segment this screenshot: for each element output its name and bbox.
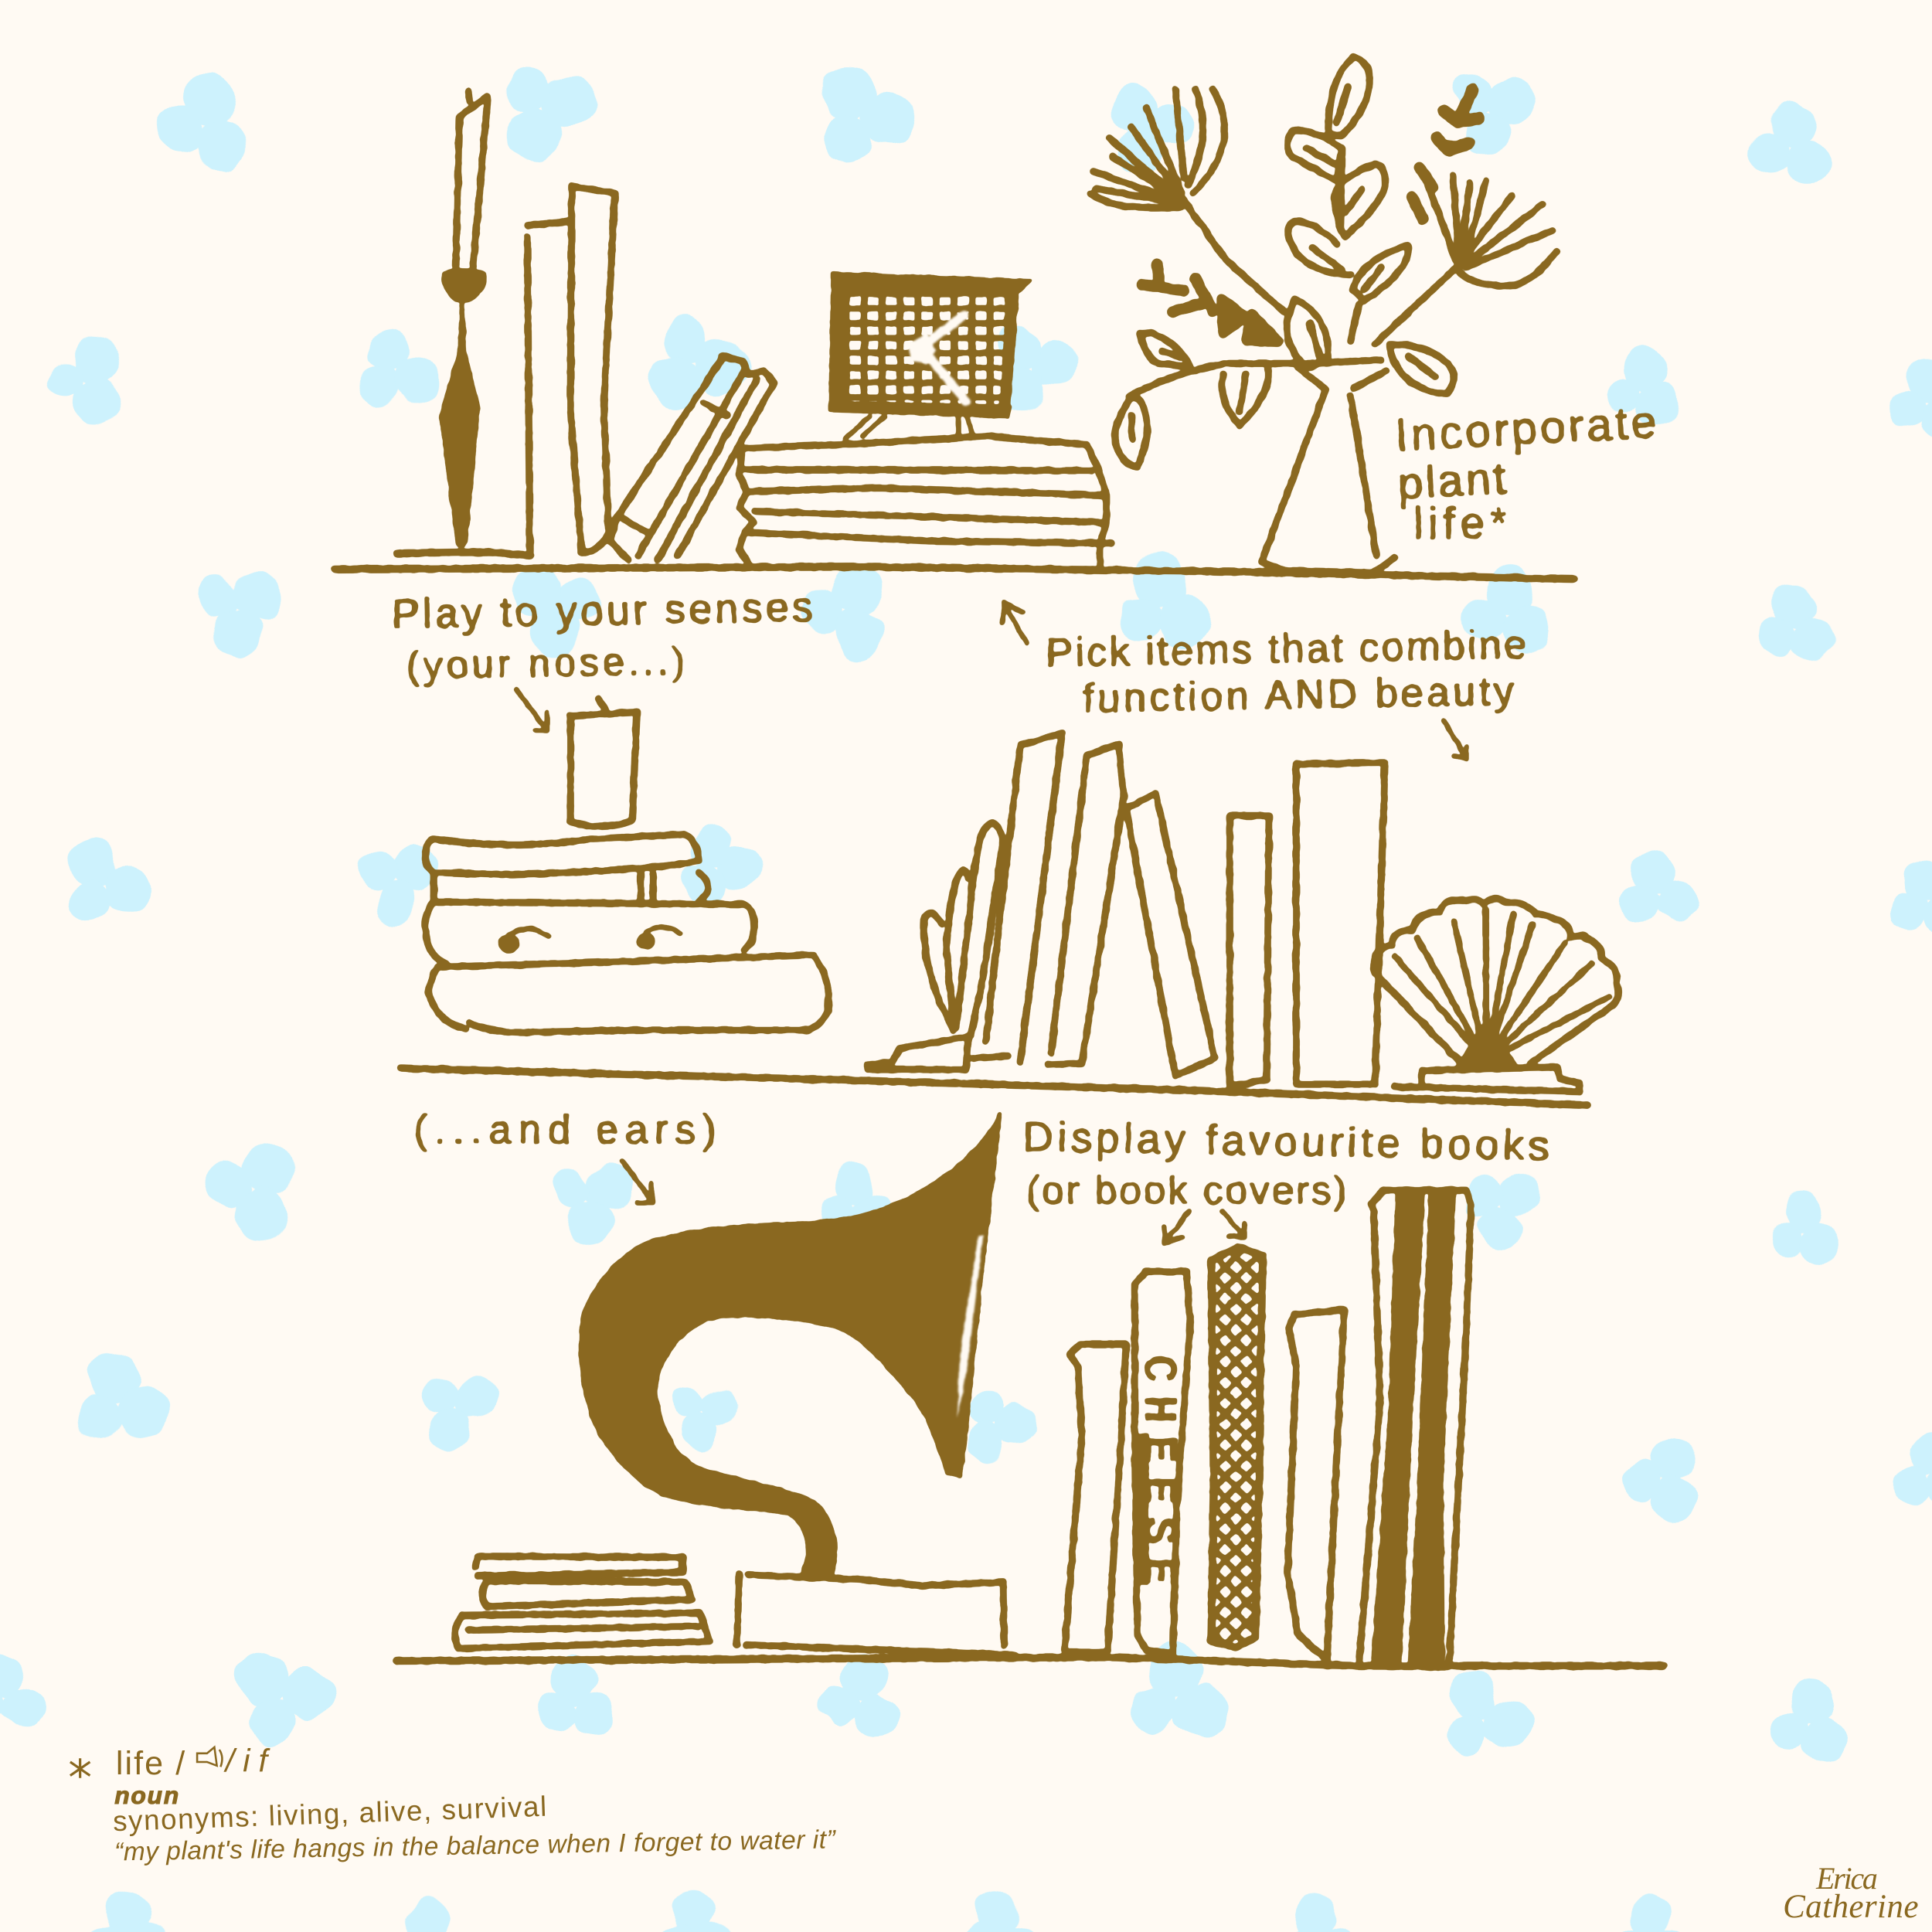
callout: incorporate plant life: plant: [1396, 452, 1507, 509]
footnote definition: /if: [223, 1743, 270, 1779]
icon: small book stack: [455, 1556, 709, 1648]
arrow: to books: [1444, 721, 1466, 759]
icon: candlestick: [441, 91, 488, 546]
footnote definition: synonyms: living, alive, survival: [113, 1791, 547, 1837]
arrow: to lattice book: [1223, 1211, 1244, 1237]
plant in vase: [1090, 56, 1556, 573]
arrow: to gramophone: [622, 1161, 653, 1202]
footnote definition: “my plant's life hangs in the balance when I forget to water it”: [114, 1825, 837, 1867]
row of favourite books: [1065, 1190, 1471, 1667]
hand-drawn illustration: [335, 56, 1663, 1667]
flower left: [1090, 89, 1284, 311]
arrow: to candle: [516, 690, 547, 730]
icon: asterisk: [70, 1758, 90, 1778]
arrow: to shelf top: [1002, 603, 1026, 643]
callout: display favourite books: [1022, 1114, 1549, 1213]
callout: incorporate plant life: Incorporate: [1394, 396, 1658, 461]
footnote definition: noun: [114, 1781, 179, 1809]
stack of books under clock: [740, 436, 1111, 564]
leaves on horizontal branch: [1115, 299, 1454, 467]
tall books on shelf 1: [527, 186, 615, 553]
dark sprig on right stem: [1412, 168, 1433, 219]
leaves on centre stem: [1287, 56, 1409, 340]
icon: gramophone: [580, 1114, 1015, 1655]
signature: [1783, 1861, 1918, 1925]
footnote definition: [70, 1743, 837, 1867]
callout: play to your senses: (your nose...): [406, 638, 685, 688]
callout: display favourite books: (or book covers): [1026, 1168, 1347, 1213]
signature: Erica: [1815, 1861, 1878, 1896]
book stack with eyes: [425, 834, 828, 1032]
dark sprig top right: [1437, 90, 1478, 151]
footnote definition: life /: [116, 1745, 185, 1782]
callout: incorporate plant life: [1394, 396, 1658, 549]
shelf 2: [400, 1068, 1587, 1105]
shelf 3: [396, 1657, 1663, 1666]
dark sprig left: [1142, 264, 1277, 342]
leaning books: [610, 356, 774, 560]
icon: woven screen on stand: [831, 274, 1030, 439]
upright books on shelf 2: [974, 733, 1385, 1087]
callout: play to your senses: [391, 584, 813, 688]
callout: play to your senses: Play to your senses: [391, 584, 813, 638]
flower right: [1375, 172, 1556, 344]
icon: vase: [1262, 367, 1395, 573]
signature: Catherine: [1783, 1889, 1918, 1925]
callout: incorporate plant life: life*: [1413, 499, 1507, 549]
callout: and ears: (...and ears): [414, 1107, 716, 1153]
callout: display favourite books: Display favourite books: [1022, 1114, 1549, 1169]
icon: speaker: [197, 1747, 222, 1767]
callout: function and beauty: function AND beauty: [1083, 668, 1515, 722]
cactus bookend: [867, 823, 1003, 1070]
shelf 1: [335, 552, 1573, 579]
callout: function and beauty: [1046, 622, 1527, 722]
icon: scented candle: [570, 699, 637, 826]
icon: scallop shell: [1374, 899, 1618, 1092]
callout: function and beauty: Pick items that combine: [1046, 622, 1527, 676]
book title: CHEESE: [1132, 1355, 1182, 1584]
arrow: to cheese book: [1165, 1211, 1189, 1243]
eyes: [500, 927, 680, 951]
